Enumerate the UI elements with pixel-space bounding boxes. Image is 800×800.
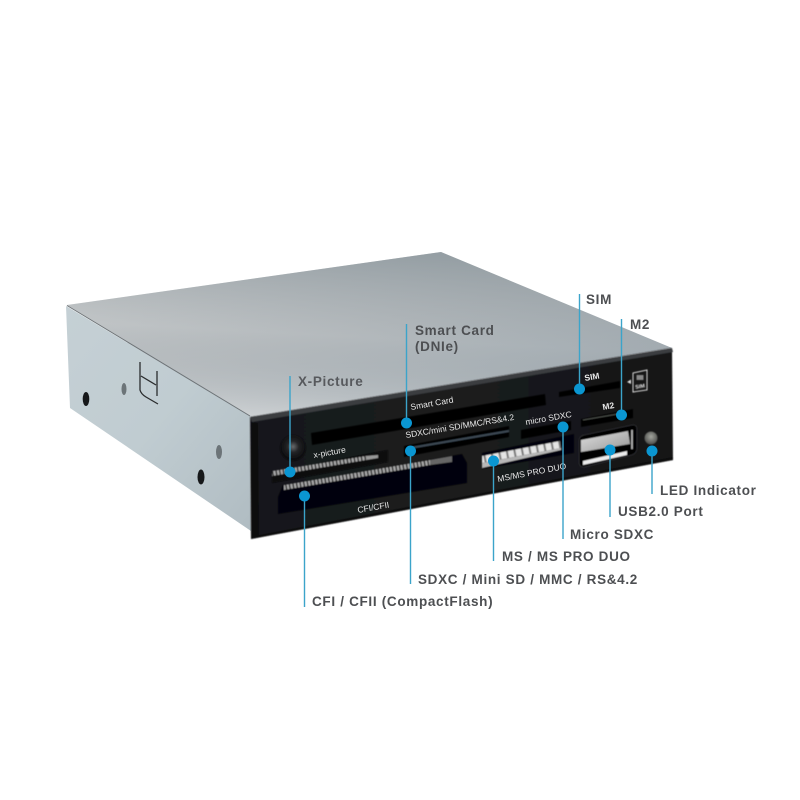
callout: M2: [616, 317, 650, 420]
callout: M2: M2: [630, 317, 650, 332]
SIM card icon: SIM: [635, 383, 646, 391]
panel slot captions: M2: [602, 400, 615, 412]
SIM slot: [559, 381, 620, 397]
panel slot captions: SIM: [584, 370, 600, 383]
callout: SIM: SIM: [586, 292, 612, 307]
panel slot captions: micro SDXC: [525, 409, 572, 427]
front panel slots: [272, 370, 658, 514]
left metal side panel: [66, 306, 251, 531]
callout: MS / MS PRO DUO: MS / MS PRO DUO: [502, 549, 631, 564]
micro SDXC slot: [521, 421, 571, 439]
callout: Smart Card: [401, 323, 495, 428]
side clip cutout: [140, 362, 158, 404]
callout: USB2.0 Port: USB2.0 Port: [618, 504, 704, 519]
callout: SDXC / Mini SD / MMC / RS&4.2: SDXC / Mini SD / MMC / RS&4.2: [418, 572, 638, 587]
callout: USB2.0 Port: [604, 444, 704, 519]
x-picture slot: [272, 450, 388, 483]
MS slot: [482, 434, 574, 469]
callout: Smart Card: (DNIe): [415, 339, 459, 354]
SIM card icon: [627, 370, 647, 392]
panel slot captions: [313, 370, 615, 515]
callout: Smart Card: Smart Card: [415, 323, 495, 338]
callout: MS / MS PRO DUO: [488, 456, 631, 564]
panel slot captions: MS/MS PRO DUO: [496, 461, 567, 484]
callout: SDXC / Mini SD / MMC / RS&4.2: [405, 446, 638, 587]
card reader device: [66, 252, 673, 539]
panel slot captions: CFI/CFII: [357, 500, 390, 515]
panel slot captions: x-picture: [313, 444, 347, 460]
M2 slot: [581, 409, 633, 427]
callout: SIM: [574, 292, 612, 394]
callout: LED Indicator: [646, 446, 757, 498]
top metal surface: [67, 252, 672, 417]
callout: CFI / CFII (CompactFlash): [299, 490, 493, 609]
callout: LED Indicator: LED Indicator: [660, 483, 757, 498]
USB port: [579, 425, 637, 467]
callout: CFI / CFII (CompactFlash): CFI / CFII (CompactFlash): [312, 594, 493, 609]
power button: [280, 435, 306, 461]
side screw holes: [83, 392, 89, 406]
callout: X-Picture: [284, 374, 363, 478]
callout: Micro SDXC: Micro SDXC: [570, 527, 654, 542]
SDXC slot: [404, 426, 509, 457]
callout: X-Picture: X-Picture: [298, 374, 363, 389]
smart card slot: [311, 394, 546, 445]
callout: Micro SDXC: [558, 422, 654, 542]
LED light: [644, 432, 658, 444]
compact flash slot: [278, 454, 467, 514]
panel slot captions: Smart Card: [410, 395, 454, 412]
panel slot captions: SDXC/mini SD/MMC/RS&4.2: [405, 412, 515, 440]
black front panel: [250, 348, 673, 539]
